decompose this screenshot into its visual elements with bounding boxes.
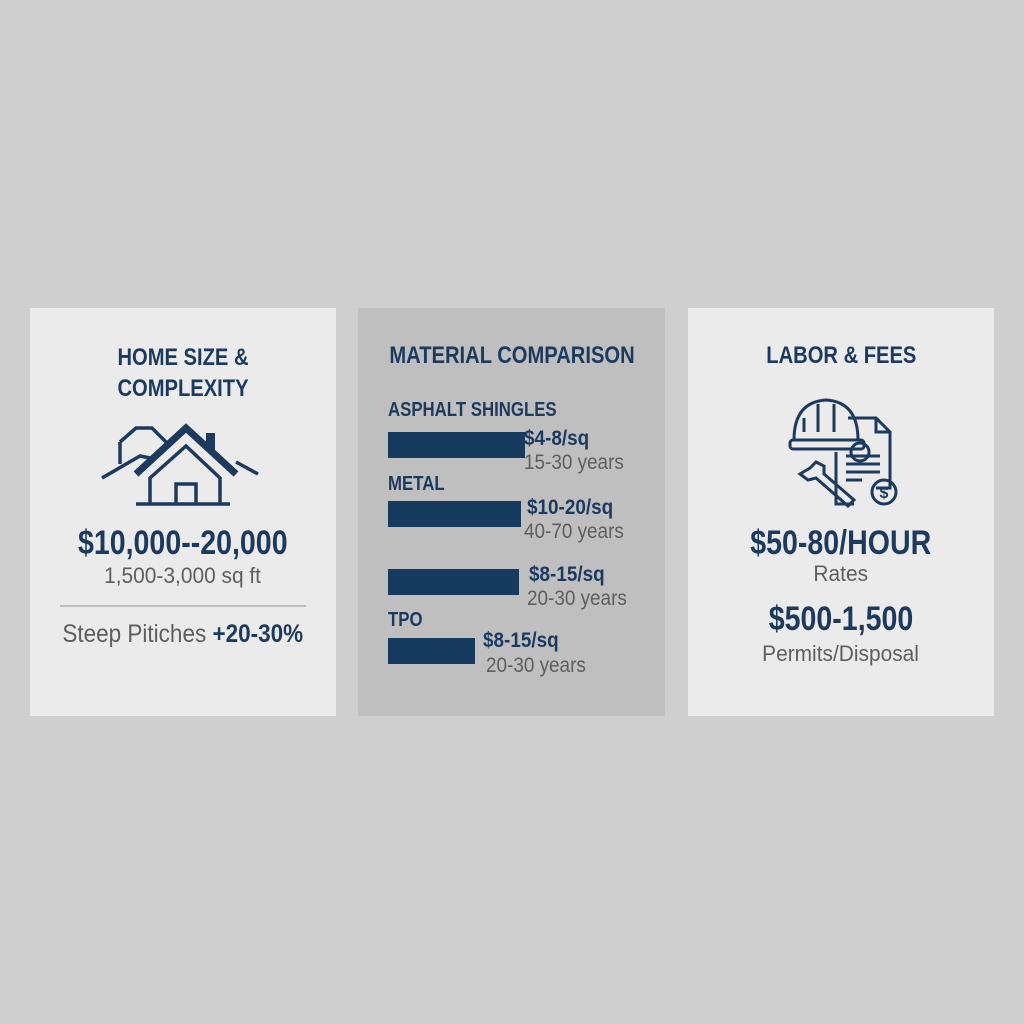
icon: hardhat, wrench, document: $	[880, 485, 889, 502]
item: metal: 40-70 years	[524, 520, 624, 543]
item: unnamed: 20-30 years	[527, 587, 627, 610]
item: tpo: TPO	[388, 609, 423, 631]
item: metal: $10-20/sq	[527, 496, 613, 519]
heading: labor: LABOR & FEES	[766, 342, 916, 369]
item: asphalt	[388, 399, 624, 474]
heading: home size: COMPLEXITY	[117, 375, 249, 402]
price: permits: $500-1,500	[769, 600, 913, 638]
text: steep pitches: Steep Pitiches +20-30%	[63, 620, 303, 648]
panel: labor & fees	[688, 308, 994, 716]
heading: home size: HOME SIZE &	[117, 344, 249, 371]
price: hourly rates: $50-80/HOUR	[751, 524, 931, 562]
item: metal	[388, 473, 624, 543]
item: asphalt: $4-8/sq	[524, 427, 589, 450]
panel: home size & complexity	[30, 308, 336, 716]
text: rates: Rates	[814, 561, 868, 586]
text: permits/disposal: Permits/Disposal	[763, 641, 919, 666]
icon: houses	[101, 423, 259, 506]
item: tpo: $8-15/sq	[483, 629, 559, 652]
item: asphalt: 15-30 years	[524, 451, 624, 474]
item: unnamed: $8-15/sq	[529, 563, 605, 586]
heading: home size	[117, 344, 249, 402]
item: tpo	[388, 609, 586, 677]
item: tpo: 20-30 years	[486, 654, 586, 677]
icon: hardhat, wrench, document	[788, 398, 898, 508]
heading: material comparison: MATERIAL COMPARISON	[389, 342, 634, 369]
price: home: $10,000--20,000	[78, 524, 288, 562]
item: unnamed	[388, 563, 627, 610]
panel: material comparison	[358, 308, 665, 716]
item: metal: METAL	[388, 473, 445, 495]
text: sq ft: 1,500-3,000 sq ft	[105, 563, 261, 588]
item: asphalt: ASPHALT SHINGLES	[388, 399, 557, 421]
